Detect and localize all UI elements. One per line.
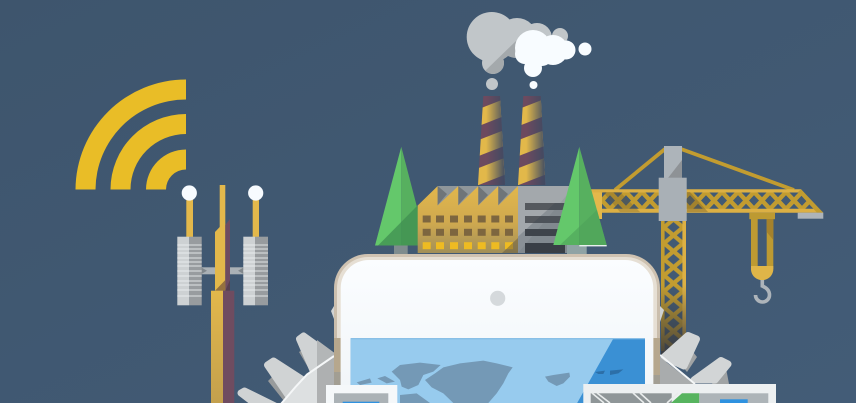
- chimney right: [518, 96, 546, 185]
- gear: right: [660, 306, 729, 385]
- gear left tooth shading: [317, 340, 336, 372]
- card: right: [583, 384, 776, 403]
- smoke cloud: white: [515, 30, 592, 89]
- crane cables: [615, 149, 794, 190]
- gear back bump right: [660, 306, 664, 322]
- phone frame: [334, 254, 660, 403]
- world map: [351, 338, 645, 403]
- crane cab: [659, 146, 687, 221]
- smoke cloud: grey: [467, 12, 568, 90]
- gear right body: [660, 357, 695, 385]
- smartphone: [334, 254, 660, 403]
- map landmasses: [357, 361, 623, 403]
- card: left: [326, 385, 397, 403]
- factory lit windows: [423, 242, 513, 249]
- chimney left: [478, 96, 505, 185]
- gear right tooth shadows: [682, 352, 729, 384]
- right antenna panel: [243, 185, 268, 305]
- crane hook: [749, 213, 775, 302]
- factory roof shadows: [438, 186, 508, 205]
- construction crane: [590, 146, 823, 355]
- factory roof: [438, 186, 518, 206]
- gear: left: [241, 306, 336, 403]
- factory wall corner shadow: [502, 238, 518, 253]
- antenna tower: [177, 185, 268, 403]
- phone camera: [490, 291, 505, 306]
- tree: left: [375, 147, 427, 254]
- card map roads: [592, 393, 678, 403]
- gear left tooth shadows: [268, 348, 320, 401]
- factory grey block: [500, 186, 572, 253]
- tree: right: [553, 147, 607, 254]
- factory windows: [423, 216, 513, 236]
- factory saw-tooth wall: [418, 186, 518, 253]
- gear left body: [281, 357, 336, 403]
- gear right teeth: [664, 336, 728, 380]
- tower connectors: [201, 267, 244, 274]
- crane jib: [590, 189, 823, 219]
- gear back bump left: [331, 306, 334, 319]
- gear left teeth: [241, 336, 334, 403]
- icon: wifi signal: [76, 80, 186, 190]
- phone screen: [341, 260, 653, 403]
- left antenna panel: [177, 185, 202, 305]
- factory: [418, 186, 572, 253]
- tower mast: [211, 185, 234, 403]
- crane mast: [661, 219, 686, 355]
